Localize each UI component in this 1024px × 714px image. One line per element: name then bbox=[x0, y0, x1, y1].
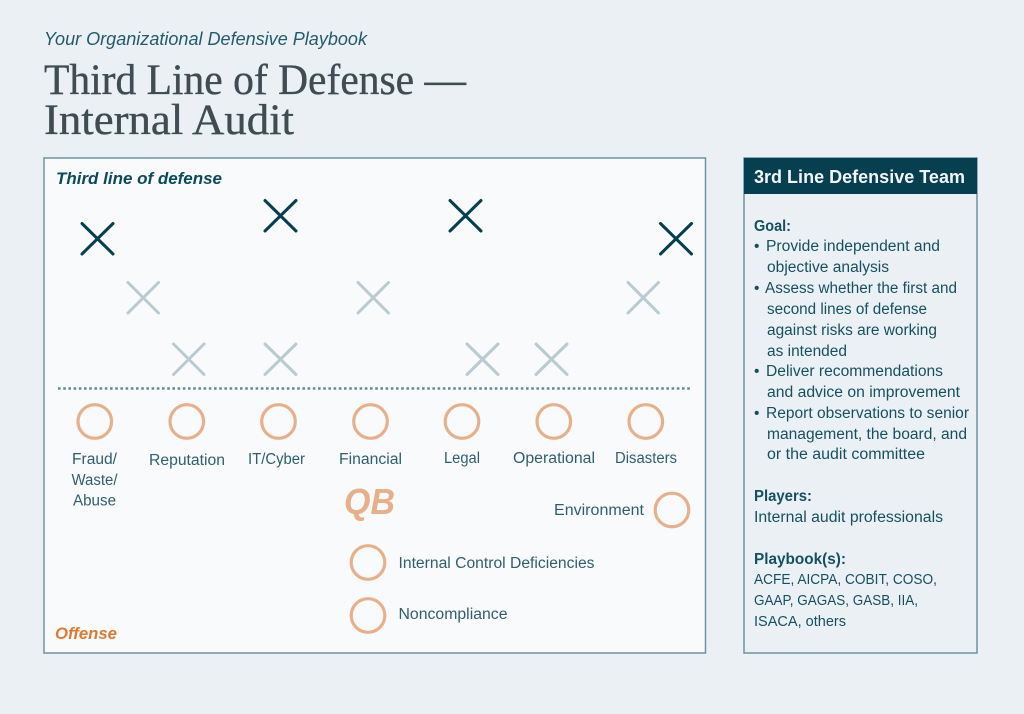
goal section: objective analysis bbox=[767, 259, 889, 276]
goal section: Provide independent and bbox=[766, 238, 940, 255]
eyebrow: Your Organizational Defensive Playbook bbox=[44, 29, 368, 49]
risk labels: Waste/ bbox=[72, 472, 118, 489]
noncompliance player: Noncompliance bbox=[398, 606, 508, 623]
goal section: as intended bbox=[767, 343, 847, 360]
risk labels: IT/Cyber bbox=[248, 451, 305, 468]
internal control deficiencies player: Internal Control Deficiencies bbox=[398, 555, 595, 572]
players section: Internal audit professionals bbox=[754, 509, 943, 526]
noncompliance player bbox=[351, 599, 508, 632]
panel: playing field bbox=[44, 158, 706, 653]
playbooks section bbox=[754, 551, 937, 630]
goal section: Goal: bbox=[754, 218, 791, 235]
title bbox=[44, 57, 467, 144]
players section bbox=[754, 488, 943, 526]
title: Third Line of Defense — bbox=[44, 57, 467, 104]
playbooks section: ACFE, AICPA, COBIT, COSO, bbox=[754, 572, 937, 588]
goal section: Deliver recommendations bbox=[766, 363, 943, 380]
environment player: Environment bbox=[554, 502, 645, 519]
goal section: management, the board, and bbox=[767, 426, 967, 443]
offense label: Offense bbox=[55, 624, 117, 643]
risk labels: Fraud/ bbox=[72, 451, 118, 468]
front defenders: dark X markers bbox=[82, 200, 692, 254]
goal section: and advice on improvement bbox=[767, 384, 961, 401]
internal control deficiencies player bbox=[351, 546, 595, 579]
goal section bbox=[754, 218, 969, 463]
panel: 3rd line defensive team bbox=[744, 158, 977, 653]
goal section: against risks are working bbox=[767, 322, 937, 339]
players section: Players: bbox=[754, 488, 812, 505]
goal section: • bbox=[754, 363, 759, 380]
environment player bbox=[554, 493, 689, 527]
defense label: Third line of defense bbox=[56, 169, 222, 188]
panel header: 3rd Line Defensive Team bbox=[754, 167, 965, 187]
goal section: second lines of defense bbox=[767, 301, 927, 318]
playbooks section: Playbook(s): bbox=[754, 551, 846, 568]
risk labels: Operational bbox=[513, 450, 595, 467]
middle and back defenders: light X markers bbox=[128, 282, 658, 374]
title: Internal Audit bbox=[44, 97, 294, 144]
quarterback label: QB bbox=[344, 481, 395, 522]
goal section: • bbox=[754, 238, 759, 255]
goal section: or the audit committee bbox=[767, 446, 925, 463]
playbooks section: ISACA, others bbox=[754, 614, 846, 630]
risk labels: Financial bbox=[339, 451, 402, 468]
risk labels: Disasters bbox=[615, 450, 677, 467]
offensive line: seven risk circles bbox=[78, 405, 663, 438]
risk labels: Legal bbox=[444, 450, 480, 467]
panel header bbox=[744, 158, 977, 194]
goal section: Report observations to senior bbox=[766, 405, 969, 422]
goal section: • bbox=[754, 405, 759, 422]
goal section: • bbox=[754, 280, 759, 297]
risk labels: Abuse bbox=[73, 492, 116, 510]
risk labels bbox=[72, 450, 677, 510]
risk labels: Reputation bbox=[149, 452, 225, 469]
goal section: Assess whether the first and bbox=[765, 280, 957, 297]
playbooks section: GAAP, GAGAS, GASB, IIA, bbox=[754, 593, 918, 609]
